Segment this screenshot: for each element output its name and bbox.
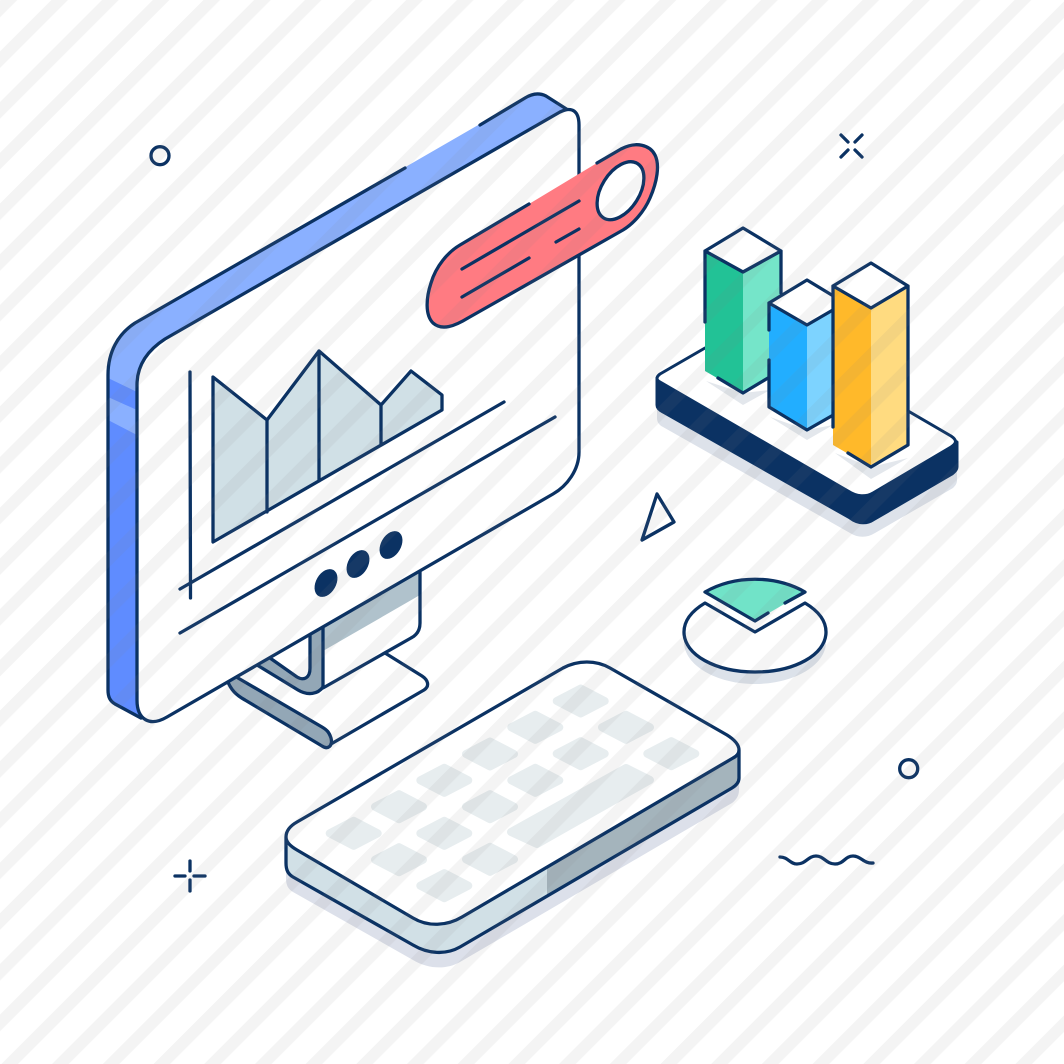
green bar shadow xyxy=(706,381,770,405)
platform shadow xyxy=(657,405,957,537)
screen divider line xyxy=(180,417,555,633)
monitor side band top xyxy=(108,94,572,470)
decorative circle top left xyxy=(151,147,169,165)
orange bar top xyxy=(833,263,908,308)
pie wedge xyxy=(705,579,805,621)
monitor side band left dark xyxy=(108,378,141,718)
green bar xyxy=(705,228,781,405)
neck shadow band xyxy=(323,572,420,651)
three buttons xyxy=(310,527,407,601)
orange bar right face xyxy=(871,286,908,467)
chart outline xyxy=(213,351,442,542)
strip outline xyxy=(257,635,323,694)
decorative plus xyxy=(175,861,205,891)
red tag xyxy=(427,145,657,327)
bar chart on platform xyxy=(657,228,957,537)
monitor screen xyxy=(137,110,579,722)
keyboard front side xyxy=(286,837,547,952)
monitor side band outline xyxy=(108,94,568,718)
keyboard top surface xyxy=(286,662,739,924)
stand foot side xyxy=(227,678,331,748)
decorative triangle xyxy=(642,494,674,540)
green bar outline xyxy=(705,228,781,393)
platform side xyxy=(657,378,957,523)
tag text lines xyxy=(462,201,579,297)
keyboard xyxy=(286,662,739,967)
blue bar right face xyxy=(807,306,840,430)
pie chart xyxy=(684,579,826,684)
blue bar left face xyxy=(769,303,807,430)
tag body xyxy=(427,145,657,327)
keyboard shadow xyxy=(286,750,739,967)
green bar left face xyxy=(705,251,743,393)
keyboard right side xyxy=(547,750,739,896)
pie base xyxy=(684,603,826,672)
orange bar xyxy=(833,263,908,479)
green bar top xyxy=(705,228,781,272)
pie wedge outline xyxy=(705,579,805,621)
orange bar shadow xyxy=(835,453,908,479)
chart y axis xyxy=(188,372,192,598)
blue bar shadow xyxy=(770,417,833,440)
neck outline xyxy=(323,572,420,688)
area chart on screen xyxy=(180,351,504,598)
tag outline xyxy=(427,145,657,327)
keyboard keys xyxy=(330,688,695,898)
stand foot outline xyxy=(227,653,428,748)
orange bar left face xyxy=(833,286,871,467)
tag hole xyxy=(587,153,654,228)
stand neck back strip xyxy=(257,628,323,694)
platform top xyxy=(657,348,956,496)
green bar right face xyxy=(743,251,781,393)
decorative circle bottom right xyxy=(900,760,918,778)
stand neck front xyxy=(323,572,420,688)
blue bar top xyxy=(769,280,840,325)
keyboard outline xyxy=(286,662,739,952)
monitor xyxy=(108,94,579,722)
orange bar outline xyxy=(833,263,908,467)
blue bar xyxy=(769,280,840,440)
decorative wave xyxy=(780,856,873,864)
monitor stand xyxy=(227,572,428,748)
blue bar outline xyxy=(769,280,840,430)
stand foot top xyxy=(238,600,428,744)
chart x axis xyxy=(180,402,504,589)
decorative cross xyxy=(841,135,862,157)
chart area xyxy=(213,351,442,542)
pie shadow xyxy=(684,632,826,684)
